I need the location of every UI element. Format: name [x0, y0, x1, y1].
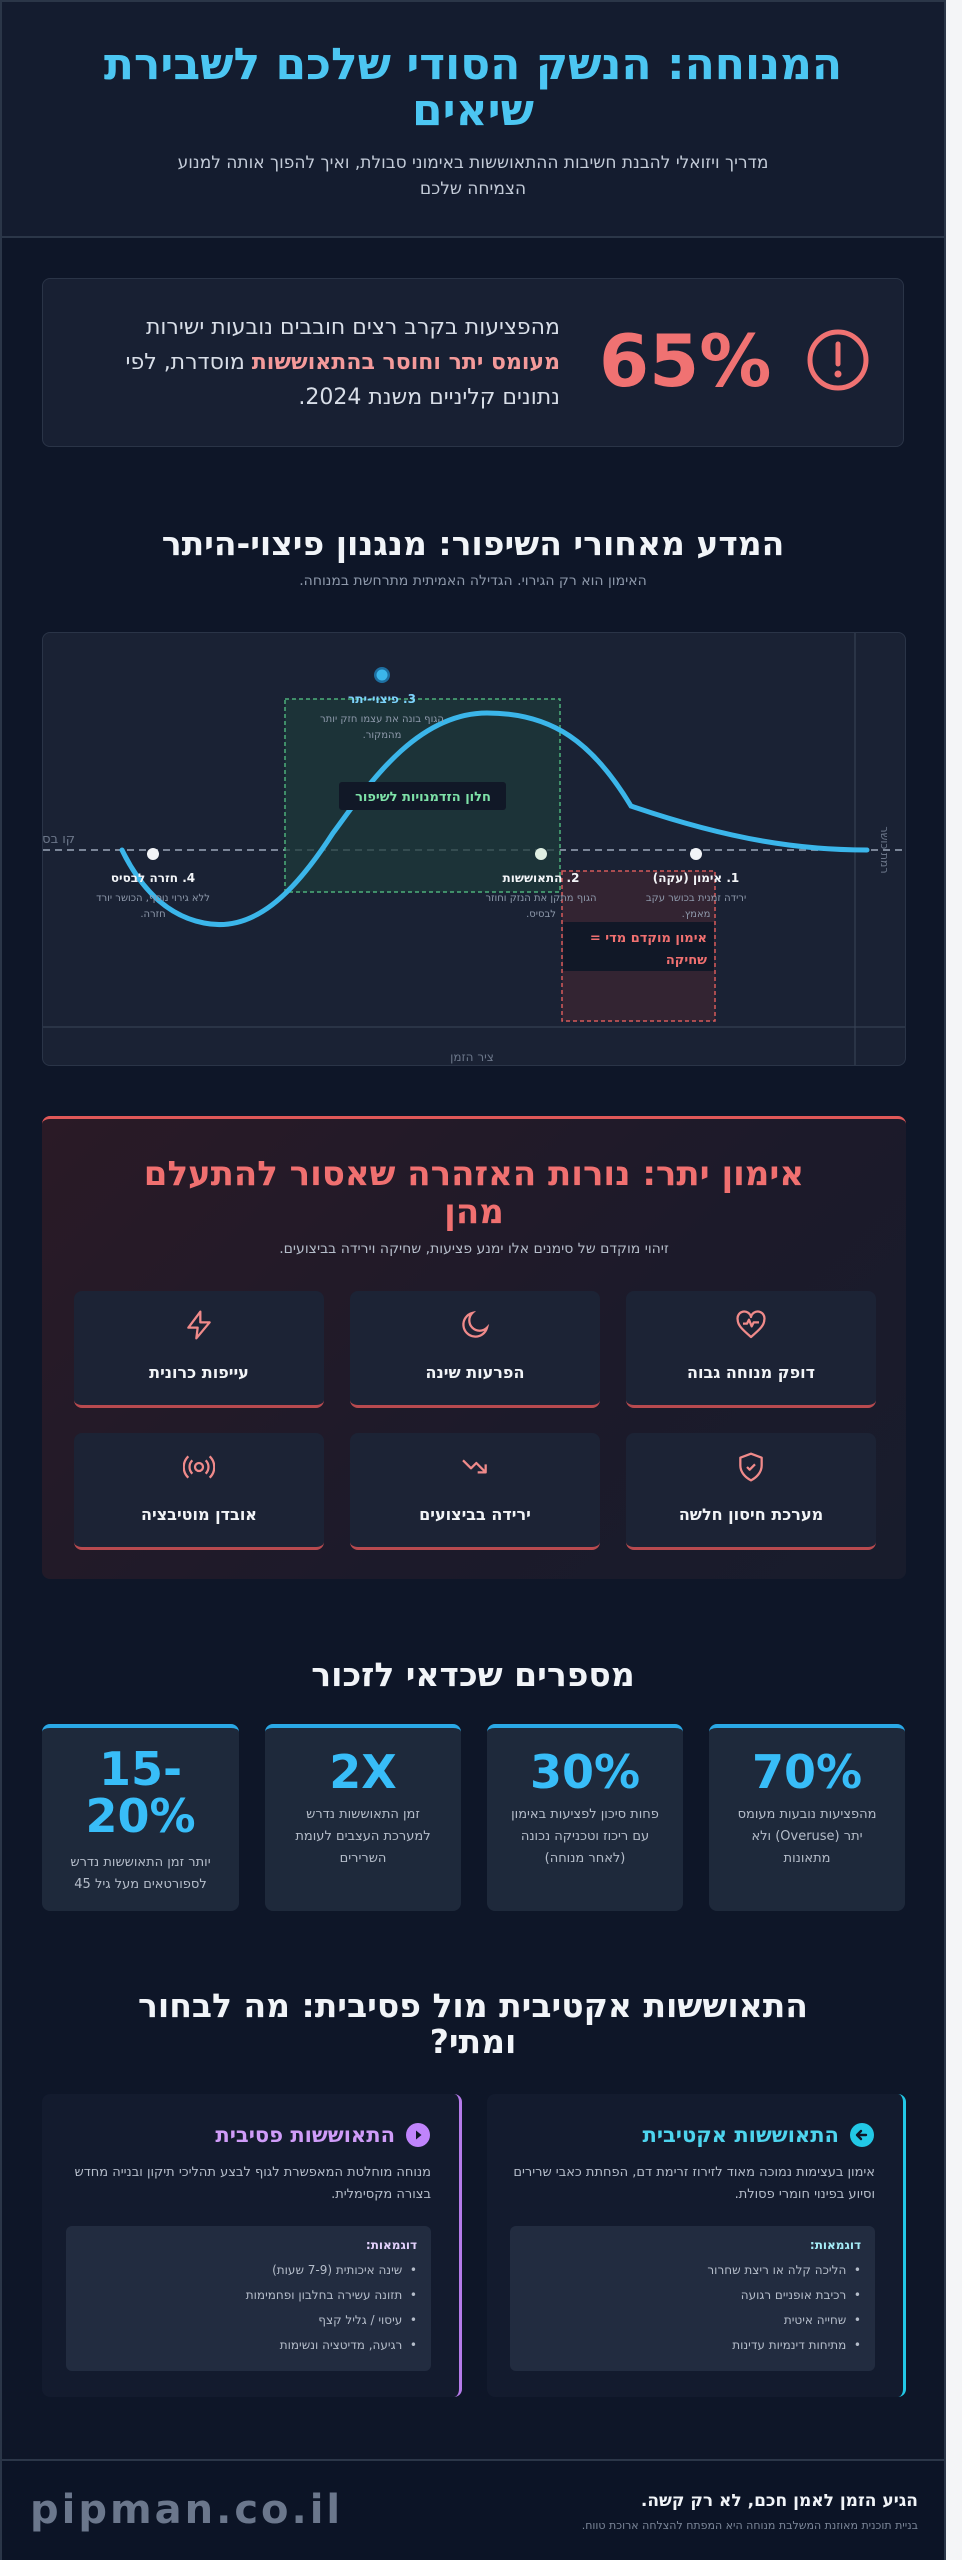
footer [2, 2459, 944, 2560]
card: performance drop: ירידה בביצועים [419, 1505, 531, 1524]
green zone [285, 699, 560, 892]
examples box [66, 2226, 431, 2371]
panel: active recovery [487, 2094, 906, 2397]
alert stat box [42, 278, 904, 447]
description: מנוחה מוחלטת המאפשרת לגוף לבצע תהליכי תיקון ובנייה מחדש בצורה מקסימלית. [74, 2165, 431, 2202]
stat card: 70% [709, 1724, 905, 1911]
examples box: • עיסוי / גליל קצף [318, 2313, 417, 2327]
examples box: • מתיחות דינמיות עדינות [732, 2338, 861, 2352]
card: sleep [350, 1291, 600, 1408]
icon: alert circle [808, 330, 868, 390]
stat text: מעומס יתר וחוסר בהתאוששות מוסדרת, לפי [126, 350, 560, 375]
section heading: active vs passive: התאוששות אקטיבית מול פסיבית: מה לבחור ומתי? [138, 1986, 808, 2061]
card: motivation [74, 1433, 324, 1550]
stat card: 15-20%: 20% [85, 1789, 196, 1843]
footer subtext: בניית תוכנית מאוזנת המשלבת מנוחה היא המפתח להצלחה ארוכת טווח. [582, 2519, 918, 2532]
stat card: 15-20%: יותר זמן התאוששות נדרש לספורטאים מעל גיל 45 [70, 1855, 211, 1892]
description: אימון בעצימות נמוכה מאוד לזירוז זרימת דם, הפחתת כאבי שרירים וסיוע בפינוי חומרי פסולת. [513, 2165, 875, 2202]
icon: moon [462, 1310, 490, 1338]
green label [339, 782, 506, 810]
icon: trend down [462, 1460, 487, 1474]
icon: bolt [187, 1310, 211, 1340]
chart panel: supercompensation: מאמץ. [682, 909, 710, 920]
stat card: 30%: פחות סיכון לפציעות באימון עם ריכוז וטכניקה נכונה (לאחר מנוחה) [511, 1807, 659, 1866]
examples box: דוגמאות: [810, 2238, 861, 2252]
card: performance drop [350, 1433, 600, 1550]
stat card: 2X [265, 1724, 461, 1911]
card: fatigue: עייפות כרונית [149, 1363, 249, 1382]
card: high resting HR: דופק מנוחה גבוה [687, 1363, 815, 1382]
warning title: אימון יתר: נורות האזהרה שאסור להתעלם מהן [144, 1154, 804, 1232]
card: high resting HR [626, 1291, 876, 1408]
panel: passive recovery [42, 2094, 462, 2397]
stat card: 70%: 70% [752, 1745, 862, 1799]
footer tagline: הגיע הזמן לאמן חכם, לא רק קשה. [641, 2491, 918, 2511]
heading with icon: התאוששות פסיבית [215, 2123, 395, 2147]
icon: heart [736, 1310, 766, 1338]
stat text: מהפציעות בקרב רצים חובבים נובעות ישירות [146, 315, 560, 340]
stage labels: 3. פיצוי-יתר [348, 692, 416, 706]
red zone: שחיקה [666, 953, 707, 968]
stat card: 70%: מהפציעות נובעות מעומס יתר (Overuse) ולא מתאונות [738, 1807, 876, 1866]
red zone [562, 871, 715, 1021]
stat card: 2X: 2X [329, 1745, 397, 1799]
chart panel: supercompensation: חזרה. [140, 909, 166, 920]
examples box: • שחייה איטית [784, 2313, 861, 2327]
examples box: דוגמאות: [366, 2238, 417, 2252]
chart panel: supercompensation: 4. חזרה לבסיס [111, 871, 195, 885]
examples box: • רכיבת אופניים רגועה [741, 2288, 861, 2302]
chart panel: supercompensation: לבסיס. [526, 909, 556, 920]
header [2, 2, 944, 238]
section heading: numbers: מספרים שכדאי לזכור [311, 1655, 635, 1694]
card: motivation: אובדן מוטיבציה [141, 1505, 257, 1524]
chart panel: supercompensation: רמת כושר [878, 826, 891, 874]
green label: חלון הזדמנויות לשיפור [355, 790, 491, 805]
section heading: science: המדע מאחורי השיפור: מנגנון פיצוי-היתר [162, 524, 784, 563]
stat card: 2X: זמן התאוששות נדרש למערכת העצבים לעומת השרירים [295, 1807, 431, 1866]
logo text: pipman.co.il [30, 2487, 343, 2533]
red zone: אימון מוקדם מדי = [590, 931, 707, 946]
card: sleep: הפרעות שינה [426, 1363, 524, 1382]
examples box: • רגיעה, מדיטציה ונשימות [280, 2338, 417, 2352]
section subtitle: האימון הוא רק הגירוי. הגדילה האמיתית מתרחשת במנוחה. [299, 573, 647, 589]
card: immune: מערכת חיסון חלשה [679, 1505, 823, 1524]
icon: signal [183, 1456, 215, 1478]
stat card: 15-20%: 15- [99, 1742, 182, 1796]
icon: shield [739, 1452, 763, 1482]
chart panel: supercompensation [42, 632, 906, 1066]
chart panel: supercompensation: ציר הזמן [450, 1050, 494, 1064]
stat text: נתונים קליניים משנת 2024. [298, 385, 560, 410]
examples box: • שינה איכותית (7-9 שעות) [272, 2263, 417, 2277]
chart panel: supercompensation: מהמקור. [363, 730, 401, 741]
heading with icon: התאוששות אקטיבית [642, 2123, 839, 2147]
warning subtitle: זיהוי מוקדם של סימנים אלו ימנע פציעות, שחיקה וירידה בביצועים. [279, 1241, 669, 1257]
dots [374, 667, 390, 683]
examples box: • הליכה קלה או ריצת שחרור [707, 2263, 861, 2277]
chart panel: supercompensation: הגוף בונה את עצמו חזק יותר [320, 714, 444, 725]
stat card: 30% [487, 1724, 683, 1911]
stat text [126, 315, 560, 410]
curve [122, 713, 867, 925]
examples box [510, 2226, 875, 2371]
card: fatigue [74, 1291, 324, 1408]
chart panel: supercompensation: 1. אימון (עקה) [653, 871, 739, 885]
title: המנוחה: הנשק הסודי שלכם לשבירת שיאים [104, 39, 842, 136]
chart panel: supercompensation: הגוף מתקן את הנזק וחוזר [485, 893, 597, 904]
card: immune [626, 1433, 876, 1550]
stat card: 30%: 30% [530, 1745, 640, 1799]
stat card: 15-20% [42, 1724, 239, 1911]
warning panel [42, 1116, 906, 1579]
subtitle: מדריך ויזואלי להבנת חשיבות ההתאוששות באימוני סבולת, ואיך להפוך אותה למנוע הצמיחה שלכם [178, 153, 768, 199]
chart panel: supercompensation: 2. התאוששות [503, 871, 579, 885]
chart panel: supercompensation: ללא גירוי נוסף, הכושר יורד [96, 893, 210, 904]
examples box: • תזונה עשירה בחלבון ופחמימות [246, 2288, 417, 2302]
chart panel: supercompensation: ירידה זמנית בכושר עקב [646, 893, 746, 904]
big number: 65% [599, 319, 771, 403]
